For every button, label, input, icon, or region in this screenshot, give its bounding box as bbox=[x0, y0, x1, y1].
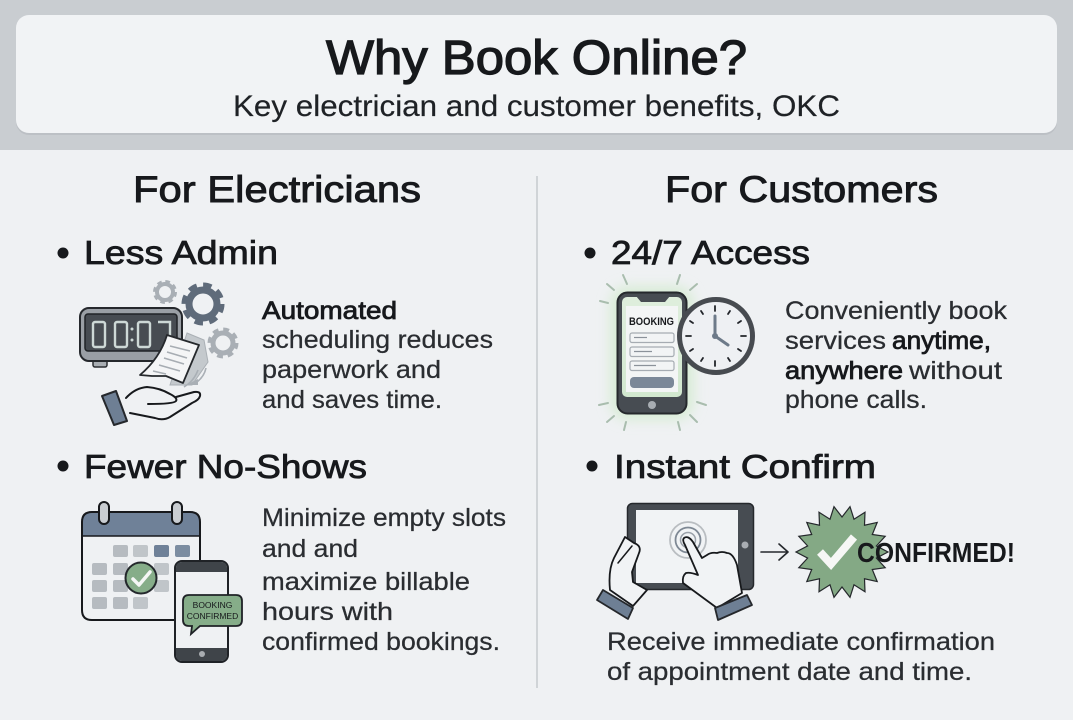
text: 24/7 access description bbox=[785, 297, 1008, 414]
text: fewer no-shows description: hours with bbox=[262, 598, 393, 626]
text: 24/7 access description: phone calls. bbox=[785, 386, 927, 414]
subtitle: Key electrician and customer benefits, OKC bbox=[233, 90, 840, 123]
text: less admin description bbox=[262, 297, 493, 414]
text: less admin description: and saves time. bbox=[262, 386, 442, 414]
icon: calendar and phone confirmation bbox=[82, 502, 242, 662]
label: booking confirmed: BOOKING bbox=[193, 600, 232, 610]
benefit heading: 24/7 access: 24/7 Access bbox=[611, 234, 810, 271]
text: fewer no-shows description: Minimize empty slots bbox=[262, 504, 506, 532]
title: Why Book Online? bbox=[326, 32, 747, 85]
heading: for customers: For Customers bbox=[665, 169, 938, 210]
text: instant confirm description bbox=[607, 628, 995, 686]
icon: hands tapping tablet bbox=[597, 504, 754, 620]
text: 24/7 access description: Conveniently book bbox=[785, 297, 1008, 325]
text: fewer no-shows description: confirmed bookings. bbox=[262, 628, 500, 656]
panel: for electricians bbox=[58, 169, 506, 662]
text: fewer no-shows description: maximize billable bbox=[262, 568, 470, 596]
text: 24/7 access description: without bbox=[908, 357, 1002, 385]
text: fewer no-shows description bbox=[262, 504, 506, 656]
benefit heading: less admin: Less Admin bbox=[84, 234, 278, 271]
label: booking: BOOKING bbox=[629, 316, 674, 328]
text: fewer no-shows description: and and bbox=[262, 535, 358, 563]
benefit heading: instant confirm: Instant Confirm bbox=[614, 448, 876, 485]
panel: for customers bbox=[584, 169, 1015, 686]
label: confirmed: CONFIRMED! bbox=[857, 537, 1015, 568]
text: instant confirm description: of appointment date and time. bbox=[607, 658, 972, 686]
icon: clock, gears, paper and hand bbox=[80, 282, 236, 425]
icon: confirmed badge bbox=[796, 507, 1015, 597]
text: 24/7 access description: anywhere bbox=[785, 357, 903, 385]
text: 24/7 access description: anytime, bbox=[892, 327, 991, 355]
label: booking confirmed: CONFIRMED bbox=[187, 611, 238, 621]
title card bbox=[16, 15, 1057, 135]
text: less admin description: Automated bbox=[262, 297, 397, 325]
text: 24/7 access description: services bbox=[785, 327, 886, 355]
icon: glowing phone and clock bbox=[599, 275, 752, 430]
text: instant confirm description: Receive immediate confirmation bbox=[607, 628, 995, 656]
heading: for electricians: For Electricians bbox=[133, 169, 421, 210]
benefit heading: fewer no-shows: Fewer No-Shows bbox=[84, 448, 367, 485]
text: less admin description: paperwork and bbox=[262, 356, 441, 384]
text: less admin description: scheduling reduces bbox=[262, 326, 493, 354]
arrow bbox=[761, 544, 788, 560]
label: booking confirmed bbox=[187, 600, 238, 621]
